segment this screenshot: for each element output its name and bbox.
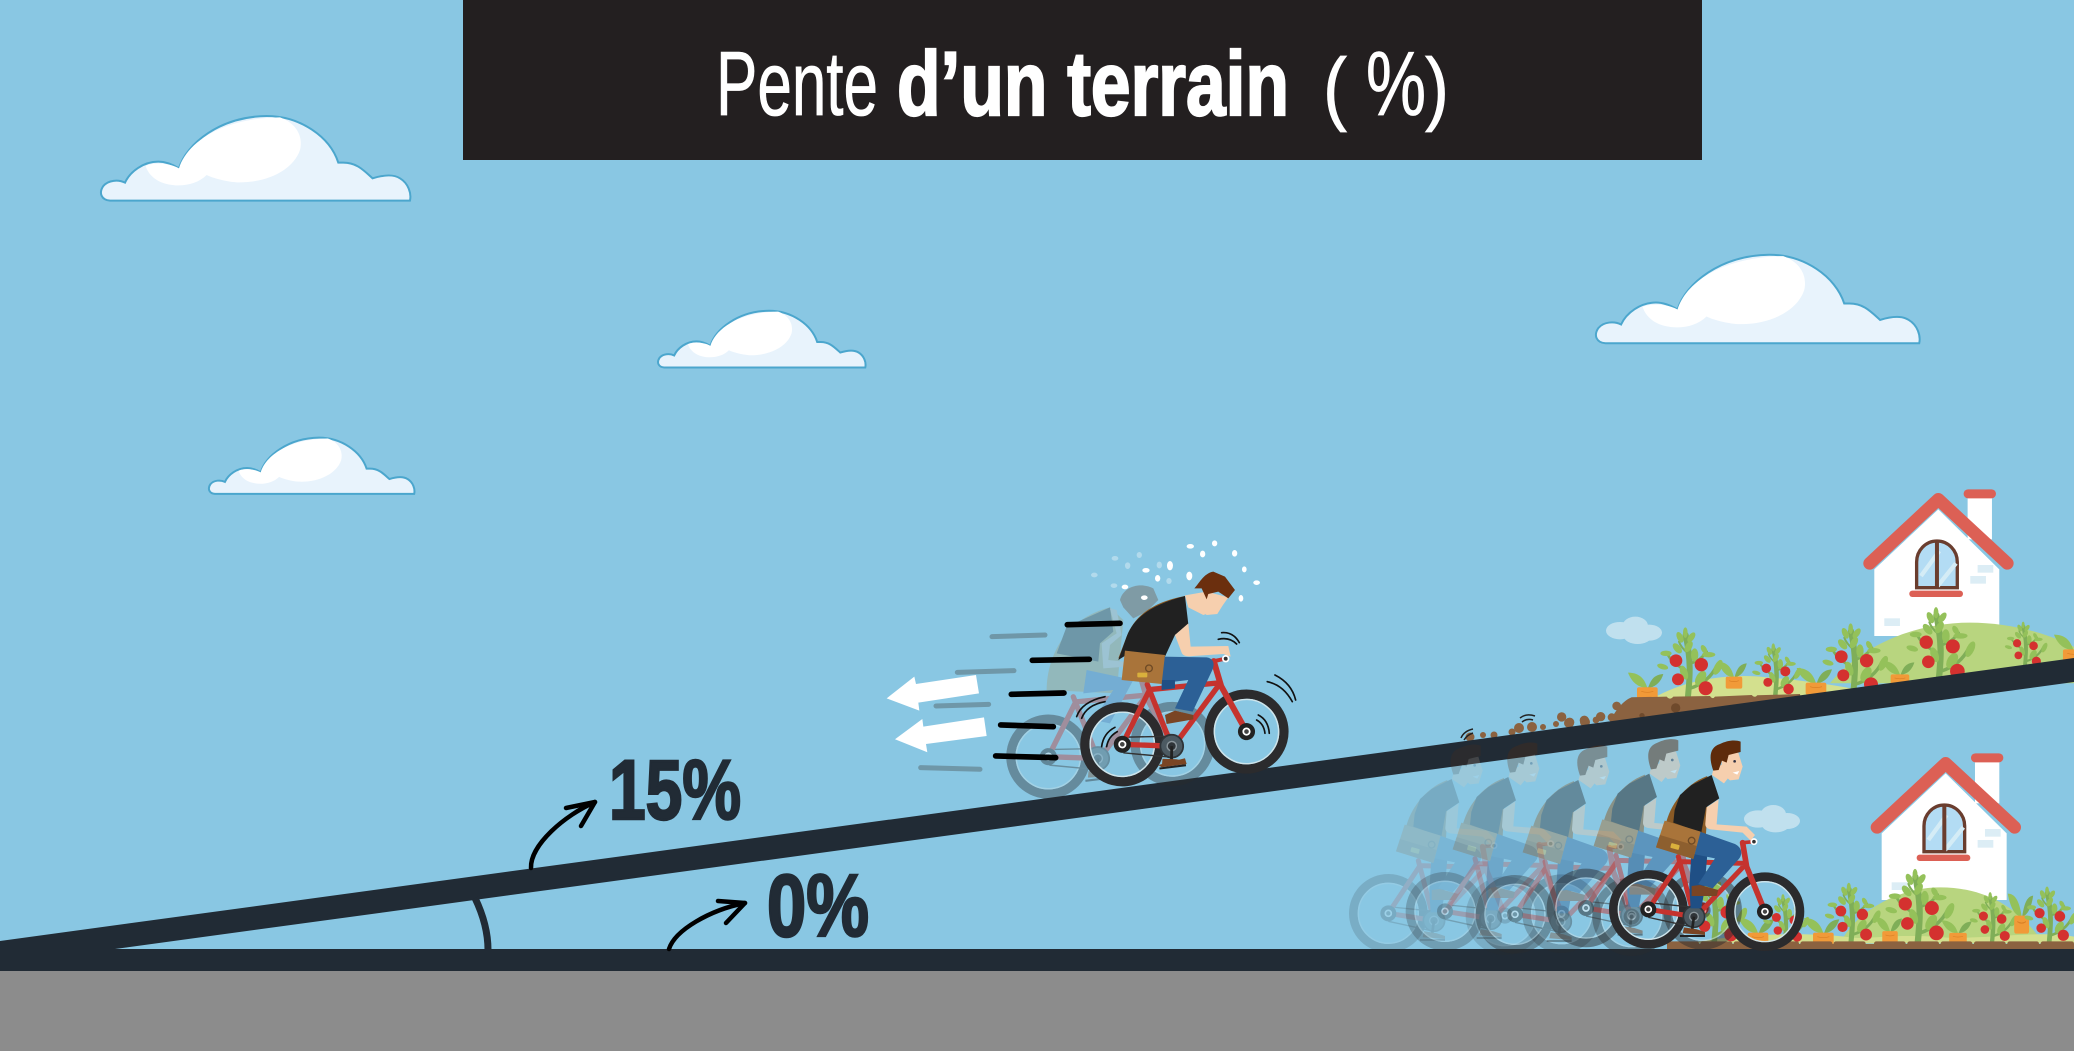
ghost rider [1047,585,1158,723]
clumps rolling downhill [1461,715,1590,742]
title text: ( [1323,42,1347,133]
title text: % [1366,34,1426,135]
sweat drops [1091,540,1260,602]
slow cyclist on the slope [887,540,1296,801]
title banner [463,0,1702,160]
small cloud puff lower [1744,805,1800,832]
fast cyclist on flat ground [1353,739,1800,952]
lower garden hills [1690,887,2074,943]
front rider [1656,740,1755,908]
speed lines black [996,623,1120,758]
white arrow lower [895,717,987,752]
white arrow upper [887,675,979,711]
lower garden plants [1684,869,2074,945]
title text: d’un terrain [897,34,1289,135]
arrow to 15% [531,802,595,868]
angle arc [475,898,488,950]
speed lines grey [921,635,1045,769]
label 0%: 0% [767,856,869,955]
icon: lower house [1877,753,2015,900]
upper house and garden [1557,489,2074,727]
front bicycle [1613,839,1800,947]
ghost 1 [1551,739,1738,945]
cloud lower left [209,438,414,494]
small cloud puff upper [1606,617,1662,644]
ghost 3 [1410,742,1597,949]
bicycle [1076,650,1288,789]
upper garden hills [1653,623,2074,710]
title text: Pente [716,34,878,135]
grey ground [0,971,2074,1051]
lower garden [1667,753,2074,951]
lower soil strip [1667,941,2074,951]
tired rider [1118,572,1235,767]
ghost 4 [1353,744,1540,951]
motion ticks [1077,633,1296,747]
sloped terrain 15% [0,658,2074,949]
cloud right [1596,255,1920,343]
ghost bicycle [1002,662,1214,801]
cloud centre [658,311,866,367]
icon: upper house [1870,489,2007,636]
flat terrain 0% [0,949,2074,971]
label 15%: 15% [609,743,741,837]
title text: ) [1425,42,1449,133]
upper garden plants [1628,607,2074,699]
ghost 2 [1480,745,1667,952]
soil mound and clumps [1557,694,1803,727]
arrow to 0% [669,901,745,949]
cloud top left [101,116,410,201]
